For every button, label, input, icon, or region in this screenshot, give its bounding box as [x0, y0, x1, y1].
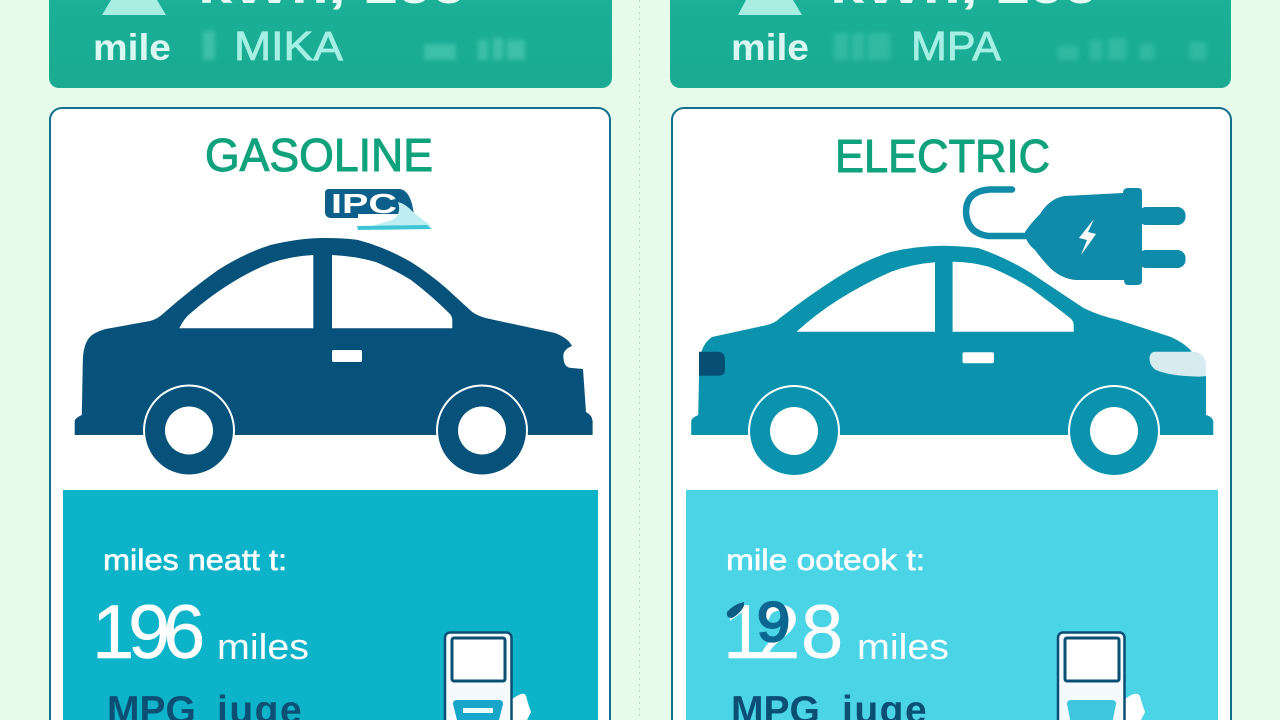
panel: gasoline stats	[63, 490, 598, 720]
electric range unit: miles	[857, 626, 949, 667]
gasoline stat caption: miles neatt t:	[103, 544, 287, 577]
icon: electric fuel pump	[1058, 632, 1145, 720]
icon: gasoline logo badge	[325, 188, 432, 230]
icon: gasoline car	[75, 238, 593, 476]
panel: gasoline top banner	[49, 0, 612, 88]
gasoline banner blurred marks	[203, 31, 525, 60]
electric range value: 128	[723, 590, 843, 675]
icon: electric banner trapezoid	[738, 0, 802, 15]
electric banner MPA label: MPA	[911, 23, 1002, 69]
heading: gasoline: GASOLINE	[205, 129, 433, 181]
icon: electric car	[691, 246, 1213, 477]
panel: electric top banner	[670, 0, 1231, 88]
heading: electric: ELECTRIC	[835, 130, 1050, 182]
gasoline banner unit label: mile	[93, 27, 171, 68]
dark overlapping digit: 9	[757, 590, 790, 653]
icon: gasoline fuel pump	[445, 632, 531, 720]
icon: gasoline logo badge: IPC	[331, 188, 397, 219]
icon: gasoline banner trapezoid	[102, 0, 166, 15]
gasoline range value: 196	[92, 590, 205, 675]
gasoline banner MIKA label: MIKA	[234, 23, 344, 69]
electric banner unit label: mile	[731, 27, 809, 68]
gasoline range unit: miles	[217, 626, 309, 667]
panel: electric card	[672, 108, 1231, 720]
electric stat caption: mile ooteok t:	[726, 544, 925, 577]
panel: electric stats	[686, 490, 1218, 720]
icon: electric plug	[966, 188, 1186, 285]
electric banner blurred marks	[834, 33, 1206, 60]
panel: gasoline card	[50, 108, 610, 720]
